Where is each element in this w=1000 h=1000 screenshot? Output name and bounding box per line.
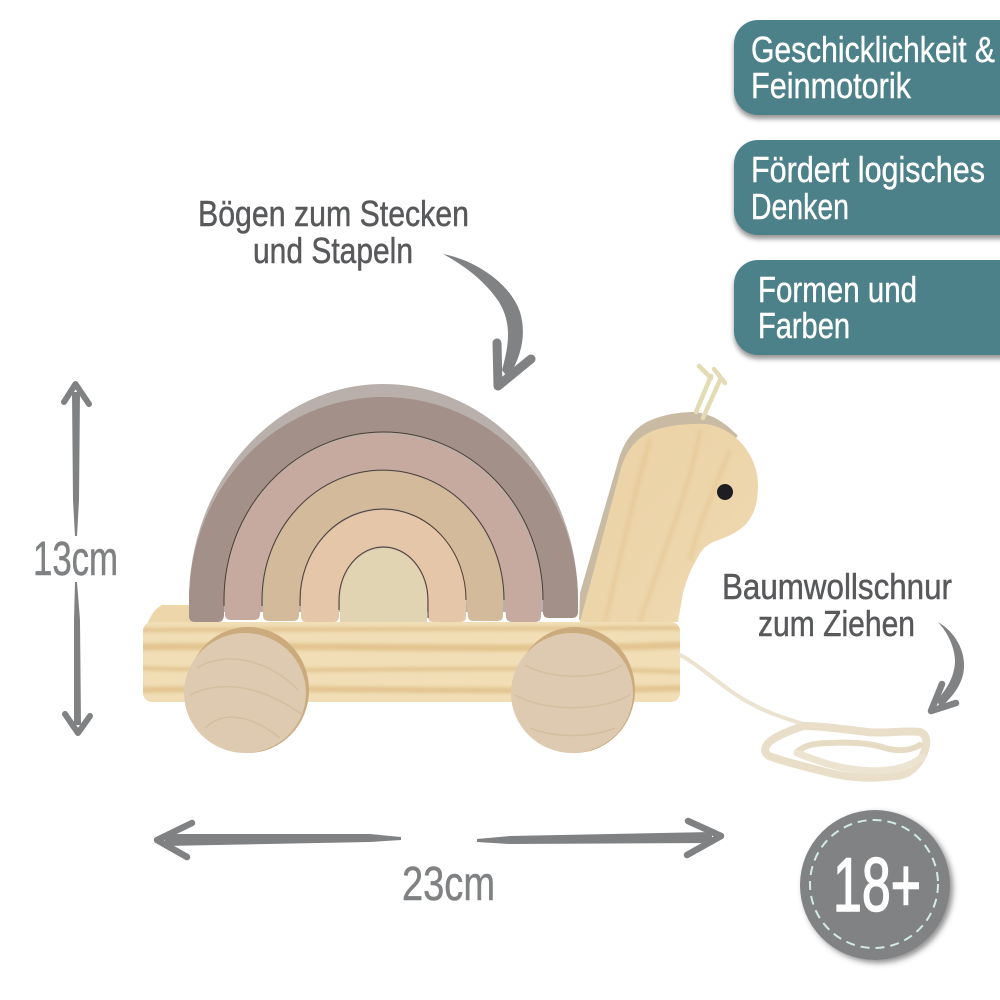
callout: Baumwollschnur zum Ziehen — [722, 566, 952, 644]
snail: back layer of shell — [189, 384, 578, 612]
snail: antenna cord — [696, 366, 725, 418]
callout: Bögen zum Stecken und Stapeln: und Stapeln — [253, 230, 413, 271]
toy: wooden snail — [140, 366, 758, 753]
callout: Baumwollschnur zum Ziehen: zum Ziehen — [758, 603, 915, 644]
panel: benefit Geschicklichkeit & Feinmotorik — [734, 20, 1000, 115]
snail: outer arch taupe — [189, 397, 578, 622]
arrow: width right — [477, 821, 721, 855]
snail: eye — [717, 484, 733, 500]
panel: benefit Fördert logisches Denken: Denken — [751, 186, 849, 227]
panel: benefit Geschicklichkeit & Feinmotorik: Feinmotorik — [751, 65, 912, 106]
snail: second arch dusty rose — [225, 434, 541, 622]
snail: fourth arch peach — [301, 510, 466, 622]
dimension: width 23cm — [157, 821, 721, 911]
snail: centre block cream — [340, 548, 427, 622]
label: 13cm: 13cm — [33, 533, 118, 586]
arrow: height up — [64, 384, 89, 536]
cotton pull cord — [680, 655, 926, 778]
arrow: to the cord — [931, 622, 964, 711]
snail: third arch sand — [263, 471, 503, 621]
callout: Baumwollschnur zum Ziehen: Baumwollschnur — [722, 566, 952, 607]
snail: base plank — [143, 622, 680, 702]
badge: age 18+ — [800, 810, 950, 960]
panel: benefit Fördert logisches Denken — [734, 140, 1000, 235]
snail: far side of plank — [143, 605, 195, 640]
badge: age 18+: 18+ — [833, 843, 921, 928]
arrow: width left — [157, 823, 401, 857]
snail: rear wheel — [184, 627, 309, 753]
dimension: height 13cm — [33, 384, 118, 733]
arrow: height down — [65, 582, 90, 733]
label: 23cm: 23cm — [402, 858, 495, 911]
panel: benefit Formen und Farben: Formen und — [758, 269, 917, 310]
snail: plank grain — [140, 628, 685, 690]
panel: benefit Formen und Farben: Farben — [758, 305, 850, 346]
snail: front wheel — [511, 627, 635, 753]
callout: Bögen zum Stecken und Stapeln — [198, 193, 469, 271]
arrow: to the arches — [443, 254, 531, 386]
panel: benefit Formen und Farben — [734, 260, 1000, 355]
snail: wooden head and neck — [580, 424, 758, 622]
callout: Bögen zum Stecken und Stapeln: Bögen zum Stecken — [198, 193, 469, 234]
snail: head back edge — [579, 412, 738, 622]
snail: head grain — [605, 430, 730, 622]
